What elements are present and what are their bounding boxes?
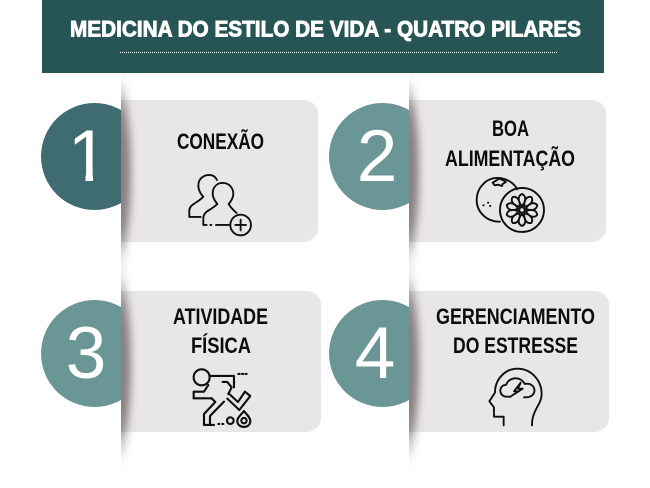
card 1 [121,100,318,242]
heading: gerenciamento do estresse [436,304,595,358]
icon: runner [194,369,250,427]
number circle 1: 1 [68,116,108,197]
heading: boa alimentação: ALIMENTAÇÃO [445,146,575,171]
panel: pillar 2 boa alimentação [329,94,606,250]
icon: head with storm cloud [489,369,542,425]
heading: boa alimentação [445,116,575,171]
title: MEDICINA DO ESTILO DE VIDA - QUATRO PILARES [70,16,581,42]
heading: gerenciamento do estresse: GERENCIAMENTO [436,304,595,329]
card 4 [409,291,609,432]
heading: gerenciamento do estresse: DO ESTRESSE [453,333,578,358]
number circle 2: 2 [357,116,397,197]
card 3 shadow [121,270,136,460]
number circle 3: 3 [66,313,106,394]
number circle 3 [41,300,121,407]
card 4 shadow [409,270,424,460]
heading: atividade física: ATIVIDADE [173,304,268,329]
icon: people with plus [189,175,251,235]
panel: pillar 1 conexão [41,94,318,250]
number circle 4 [329,300,409,407]
card 1 shadow [121,78,136,266]
icon: orange [477,178,544,232]
number circle 4: 4 [355,313,395,394]
header banner [42,0,604,73]
heading: boa alimentação: BOA [492,116,529,141]
heading: atividade física: FÍSICA [191,333,251,358]
panel: pillar 3 atividade física [41,285,321,445]
number circle 1 [41,103,121,210]
heading: conexão: CONEXÃO [177,129,264,154]
card 2 [409,100,606,242]
number circle 2 [329,103,409,210]
card 3 [121,291,321,432]
panel: pillar 4 gerenciamento do estresse [329,285,609,445]
card 2 shadow [409,78,424,266]
heading: atividade física [173,304,268,358]
